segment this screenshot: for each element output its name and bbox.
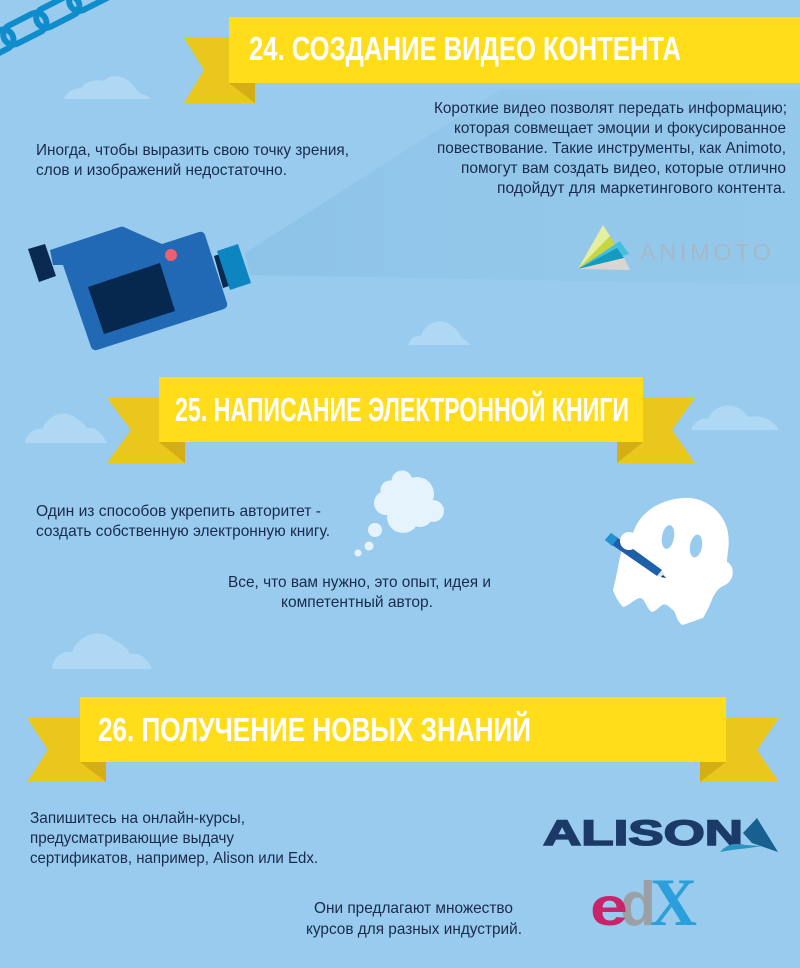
text: intro 24 left [36, 142, 349, 179]
text: video description: помогут вам создать видео, которые отлично [461, 160, 786, 177]
text: courses: сертификатов, например, Alison или Edx. [30, 850, 318, 867]
text: video description: Короткие видео позволят передать информацию; [434, 100, 787, 117]
text: intro 24 left: Иногда, чтобы выразить свою точку зрения, [36, 142, 349, 159]
text: ebook note [228, 574, 491, 611]
cloud: right of banner 25 [691, 406, 779, 430]
banner 25 [107, 377, 695, 463]
logo: edX [590, 864, 697, 940]
icon: chain [0, 0, 116, 65]
text: video description: подойдут для маркетингового контента. [497, 180, 786, 197]
text: industries [306, 900, 522, 938]
text: video description: повествование. Такие инструменты, как Animoto, [437, 140, 786, 157]
logo: Alison [543, 814, 778, 853]
text: industries: Они предлагают множество [314, 900, 513, 917]
logo: Alison: ALISON [543, 814, 743, 853]
text: ebook intro: Один из способов укрепить авторитет - [36, 503, 321, 520]
heading: 26: 26. ПОЛУЧЕНИЕ НОВЫХ ЗНАНИЙ [98, 710, 531, 748]
text: ebook intro: создать собственную электронную книгу. [36, 523, 330, 540]
banner 26 [27, 697, 779, 782]
text: ebook note: Все, что вам нужно, это опыт, идея и [228, 574, 491, 591]
logo: edX: X [650, 864, 697, 940]
text: courses [30, 810, 318, 867]
text: video description [434, 100, 787, 197]
logo wordmark: ANIMOTO [640, 239, 771, 265]
icon: camera light beam [245, 90, 800, 285]
cloud: centre [408, 321, 470, 345]
text: ebook intro [36, 503, 330, 540]
text: ebook note: компетентный автор. [281, 594, 433, 611]
text: industries: курсов для разных индустрий. [306, 921, 522, 938]
logo: edX: e [590, 877, 628, 937]
cloud: lower left [52, 634, 152, 669]
banner 24 [184, 17, 800, 103]
heading: 24: 24. СОЗДАНИЕ ВИДЕО КОНТЕНТА [249, 30, 681, 67]
icon: ghost with pen [605, 498, 733, 625]
text: courses: Запишитесь на онлайн-курсы, [30, 810, 245, 827]
text: video description: которая совмещает эмоции и фокусированное [454, 120, 786, 137]
icon: video camera [28, 227, 251, 350]
text: intro 24 left: слов и изображений недостаточно. [36, 162, 287, 179]
logo: edX: d [620, 870, 656, 939]
icon: thought bubble [354, 470, 444, 556]
logo: Animoto [578, 225, 771, 270]
cloud: top left [64, 76, 151, 99]
text: courses: предусматривающие выдачу [30, 830, 234, 847]
cloud: left of banner 25 [25, 414, 107, 443]
